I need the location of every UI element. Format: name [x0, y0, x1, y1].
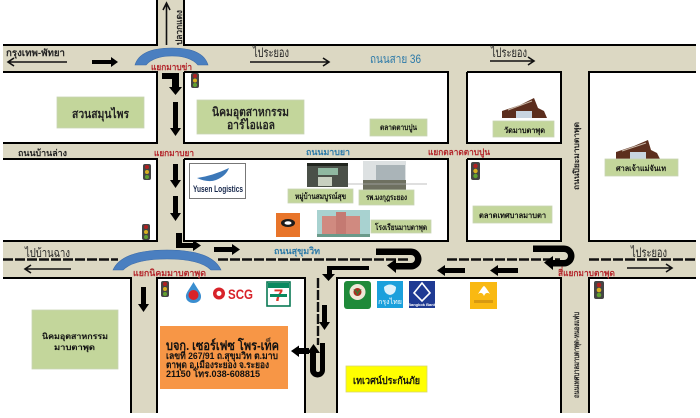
icon: temple roof 2 — [616, 140, 660, 159]
logo: Krungsri — [470, 282, 497, 309]
label: herb garden: สวนสมุนไพร — [72, 106, 129, 122]
overpass: Sukhumvit junction — [113, 250, 221, 270]
address: ตาพุด อ.เมืองระยอง จ.ระยอง — [166, 359, 269, 371]
road label: to Rayong 2: ไประยอง — [490, 45, 527, 60]
road label: vertical lower: ถนนเทศบาลมาบตาพุด-หนองแฟบ — [572, 312, 582, 398]
road label: Highway 36: ถนนสาย 36 — [370, 52, 421, 66]
logo: Krungthai Bank: กรุงไทย — [378, 297, 402, 306]
label: village — [288, 189, 353, 203]
label: RIL industrial estate: นิคมอุตสาหกรรม — [212, 105, 289, 120]
company address box — [160, 326, 288, 389]
photo: Mongkut Rayong hospital — [363, 161, 406, 190]
logo: SCG — [213, 286, 253, 302]
label: Map Ta Phut industrial estate: มาบตาพุด — [54, 343, 95, 353]
logo: Krungthai Bank — [377, 281, 403, 308]
label: shrine — [605, 159, 678, 176]
logo: Yusen Logistics — [190, 164, 246, 198]
label: Thai Insurance agent: เทเวศน์ประกันภัย — [353, 375, 420, 387]
label: hospital: รพ.มงกุฎระยอง — [366, 193, 407, 203]
logo: orange brand — [276, 213, 300, 237]
label: hospital — [359, 190, 414, 205]
photo: village — [307, 163, 348, 187]
road label: to Rayong 3: ไประยอง — [630, 245, 667, 260]
address: เลขที่ 267/91 ถ.สุขุมวิท ต.มาบ — [166, 348, 278, 362]
label: municipal market: ตลาดเทศบาลมาบตา — [479, 211, 546, 220]
logo: 7-Eleven — [267, 282, 290, 306]
junction label: market junction: แยกตลาดตาบปูน — [428, 147, 491, 158]
logo: Yusen Logistics: Yusen Logistics — [193, 184, 243, 195]
road label: Ban Lang road: ถนนบ้านล่าง — [18, 148, 67, 158]
junction label: Map Ta Phut crossroads: สี่แยกมาบตาพุด — [558, 266, 615, 279]
icon: temple roof 1 — [502, 98, 547, 118]
label: market — [370, 119, 427, 136]
junction label: Map Kha: แยกมาบข่า — [151, 62, 192, 72]
road label: to Rayong 1: ไประยอง — [252, 45, 289, 60]
label: Map Ta Phut industrial estate: นิคมอุตสาหกรรม — [42, 332, 108, 342]
logo: Bangkok Bank — [408, 281, 437, 308]
overpass: upper junction — [135, 48, 208, 65]
thin direction arrows — [8, 3, 672, 273]
junction label: Map Ya: แยกมาบยา — [154, 148, 194, 158]
road label: Map Ya road: ถนนมาบยา — [306, 147, 350, 157]
road label: Sukhumvit: ถนนสุขุมวิท — [274, 246, 320, 257]
route arrows — [92, 57, 574, 378]
label: Map Ta Phut temple — [493, 121, 554, 137]
traffic lights — [142, 73, 604, 299]
logo: 7-Eleven: 7 — [274, 286, 283, 305]
label: Thai Insurance agent — [346, 366, 427, 392]
road label: Bangkok-Pattaya: กรุงเทพ-พัทยา — [6, 48, 65, 59]
road label: Pluak Daeng: ปลวกแดง — [174, 10, 184, 45]
label: herb garden — [57, 97, 144, 128]
label: school: โรงเรียนมาบตาพุด — [374, 222, 427, 233]
logo: Bangkok Bank: Bangkok Bank — [408, 302, 437, 307]
logo: Kasikorn Bank — [344, 281, 371, 309]
logo: PTT — [186, 282, 201, 303]
label: RIL industrial estate: อาร์ไอแอล — [227, 117, 275, 132]
company name: บจก. เซอร์เฟซ โพร-เท็ค — [166, 336, 279, 353]
label: municipal market — [473, 206, 552, 223]
label: village: หมู่บ้านสมบูรณ์สุข — [295, 191, 346, 202]
label: school — [371, 220, 431, 233]
address: 21150 โทร.038-608815 — [166, 368, 261, 380]
junction label: estate junction: แยกนิคมมาบตาพุด — [133, 268, 206, 279]
label: Map Ta Phut industrial estate — [32, 310, 118, 369]
logo: SCG: SCG — [228, 286, 253, 302]
label: Map Ta Phut temple: วัดมาบตาพุด — [504, 126, 545, 136]
road label: vertical upper: ถนนปิยะมาบตาพุด — [572, 122, 582, 190]
road label: to Ban Chang: ไปบ้านฉาง — [24, 246, 70, 260]
label: shrine: ศาลเจ้าแม่จันเท — [616, 163, 666, 173]
picture: school building — [317, 210, 370, 237]
label: market: ตลาดตาบปูน — [380, 123, 417, 133]
label: RIL industrial estate — [197, 100, 304, 134]
